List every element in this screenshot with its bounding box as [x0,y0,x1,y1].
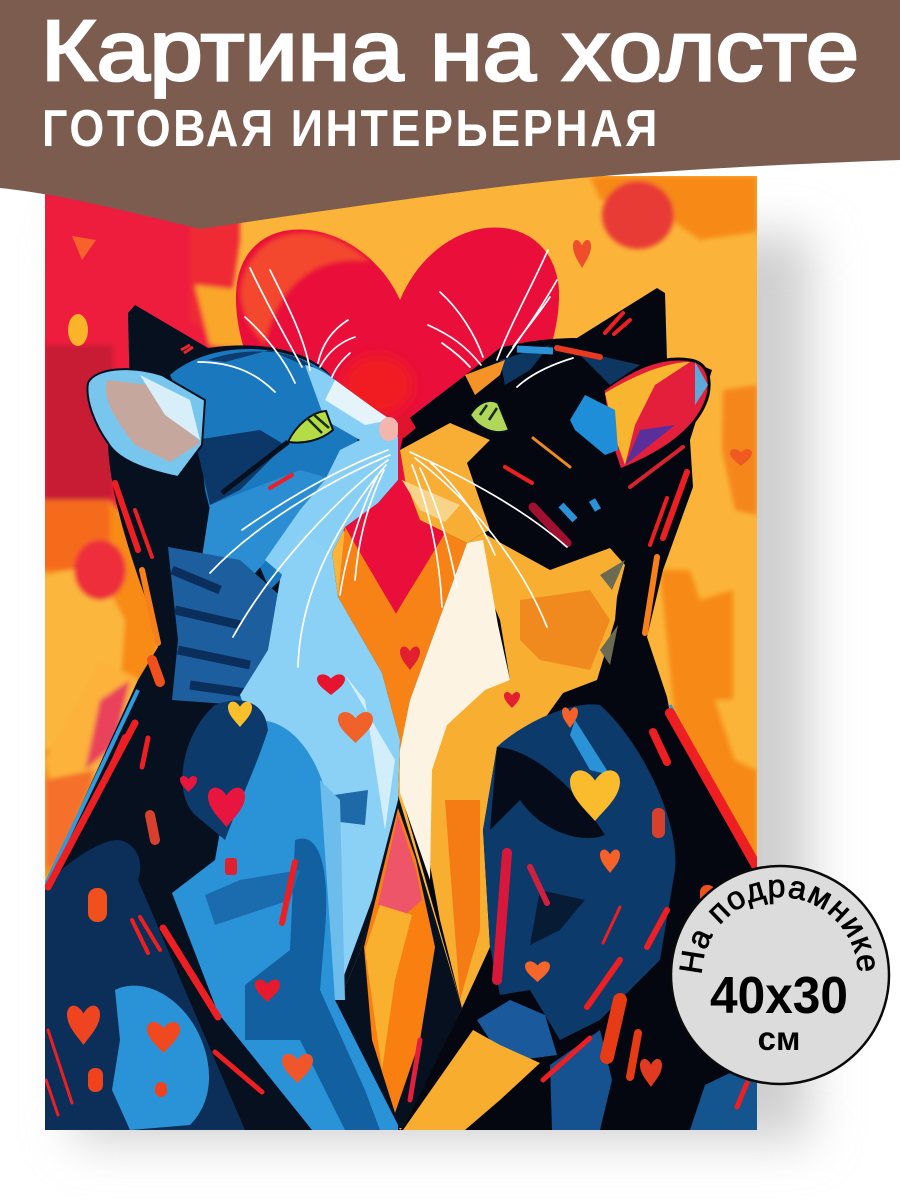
red strokes [46,475,295,1115]
title: Картина на холсте [41,4,859,99]
centre gap between cats [335,795,462,1128]
orange muzzle [400,423,490,543]
mid blue body [172,720,398,1130]
size badge [672,864,890,1086]
noses [379,413,416,441]
blue head patch [570,395,618,455]
red strokes [410,313,757,1107]
navy body [483,704,675,1040]
big red heart [236,227,559,750]
face light [265,365,398,590]
orange chest [420,533,625,1008]
fur band [168,547,285,705]
dark silhouette [400,288,757,1130]
blue paw blob [112,986,209,1130]
right ear [603,359,709,470]
left ear [87,369,205,477]
badge curved label: На подрамнике [679,879,875,973]
badge size: 40x30 [710,967,848,1025]
lower navy leg [45,840,245,1130]
bottom blue wedges [550,1030,612,1130]
right cat [400,288,757,1130]
badge unit: см [758,1020,800,1057]
navy paw patch [477,1000,557,1060]
green eye [288,411,333,443]
white chest [400,540,510,880]
green eye [470,401,509,432]
black chest patch [490,747,605,838]
small hearts and spots [67,240,752,1097]
mid blue cheek [202,470,326,574]
whiskers [198,250,573,667]
painted background [40,176,757,1130]
subtitle: ГОТОВАЯ ИНТЕРЬЕРНАЯ [42,100,660,158]
dark silhouette [45,305,400,1130]
canvas drop shadow [75,235,810,1140]
chest highlight [320,780,345,1000]
orange forehead [465,360,505,395]
outer light edge [46,690,138,884]
eye line [222,442,288,493]
left cat [45,305,400,1130]
orange heart flanks [338,527,470,750]
top banner [0,0,900,229]
dark blue patch [182,700,268,840]
painting on canvas [40,176,757,1130]
blue head stripes [517,349,598,520]
orange paw [403,1030,540,1130]
ear dots [181,345,193,353]
head blue [170,349,360,590]
outer light edge [668,704,688,736]
chest light [240,530,400,1000]
